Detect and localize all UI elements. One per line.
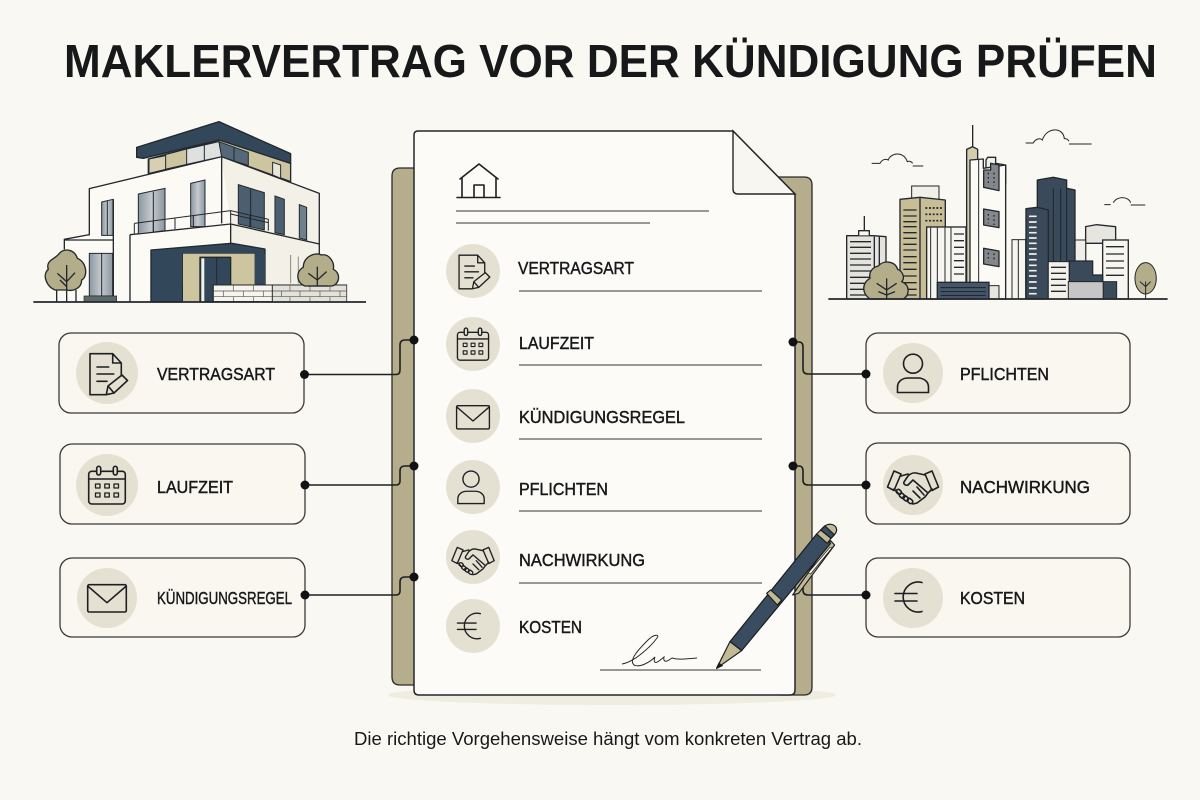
document paper [414,131,795,695]
row: Laufzeit [446,317,762,371]
connector: Laufzeit [300,462,418,490]
left card: Kündigungsregel: KÜNDIGUNGSREGEL [157,588,292,608]
row: Vertragsart: VERTRAGSART [518,258,634,278]
left card: Laufzeit: LAUFZEIT [157,477,233,497]
connector: Kündigungsregel [300,572,418,600]
left card: Vertragsart [59,333,304,413]
footnote: Die richtige Vorgehensweise hängt vom konkreten Vertrag ab. [354,729,862,749]
row: Vertragsart [446,244,762,298]
signature line [600,669,761,671]
document shadow [388,685,836,705]
right card: Nachwirkung: NACHWIRKUNG [960,477,1090,497]
connector: Kosten [803,585,870,600]
left card: Laufzeit [60,444,305,524]
left card: Kündigungsregel [60,558,305,637]
document backing board [392,168,812,695]
icon: house [457,164,500,198]
row: Kosten [446,599,582,653]
row: Kosten: KOSTEN [519,617,582,637]
pen [717,524,837,668]
right card: Kosten [866,558,1130,637]
connector: Vertragsart [300,336,418,379]
row: Nachwirkung [446,530,762,584]
right card: Pflichten [866,333,1130,413]
page fold [733,131,795,194]
row: Kündigungsregel [446,389,762,443]
title: MAKLERVERTRAG VOR DER KÜNDIGUNG PRÜFEN [64,35,1157,87]
row: Pflichten [446,460,762,514]
row: Kündigungsregel: KÜNDIGUNGSREGEL [519,407,685,427]
row: Pflichten: PFLICHTEN [519,479,608,499]
header lines [456,211,709,223]
row: Nachwirkung: NACHWIRKUNG [519,550,645,570]
right card: Nachwirkung [866,443,1130,524]
right card: Pflichten: PFLICHTEN [960,364,1049,384]
right card: Kosten: KOSTEN [960,588,1025,608]
signature [622,635,697,666]
illustration: city skyline [828,125,1168,299]
clouds [872,130,1145,205]
illustration: modern house [33,122,366,302]
row: Laufzeit: LAUFZEIT [519,333,594,353]
connector: Pflichten [788,338,870,378]
connector: Nachwirkung [788,462,870,490]
left card: Vertragsart: VERTRAGSART [157,364,275,384]
